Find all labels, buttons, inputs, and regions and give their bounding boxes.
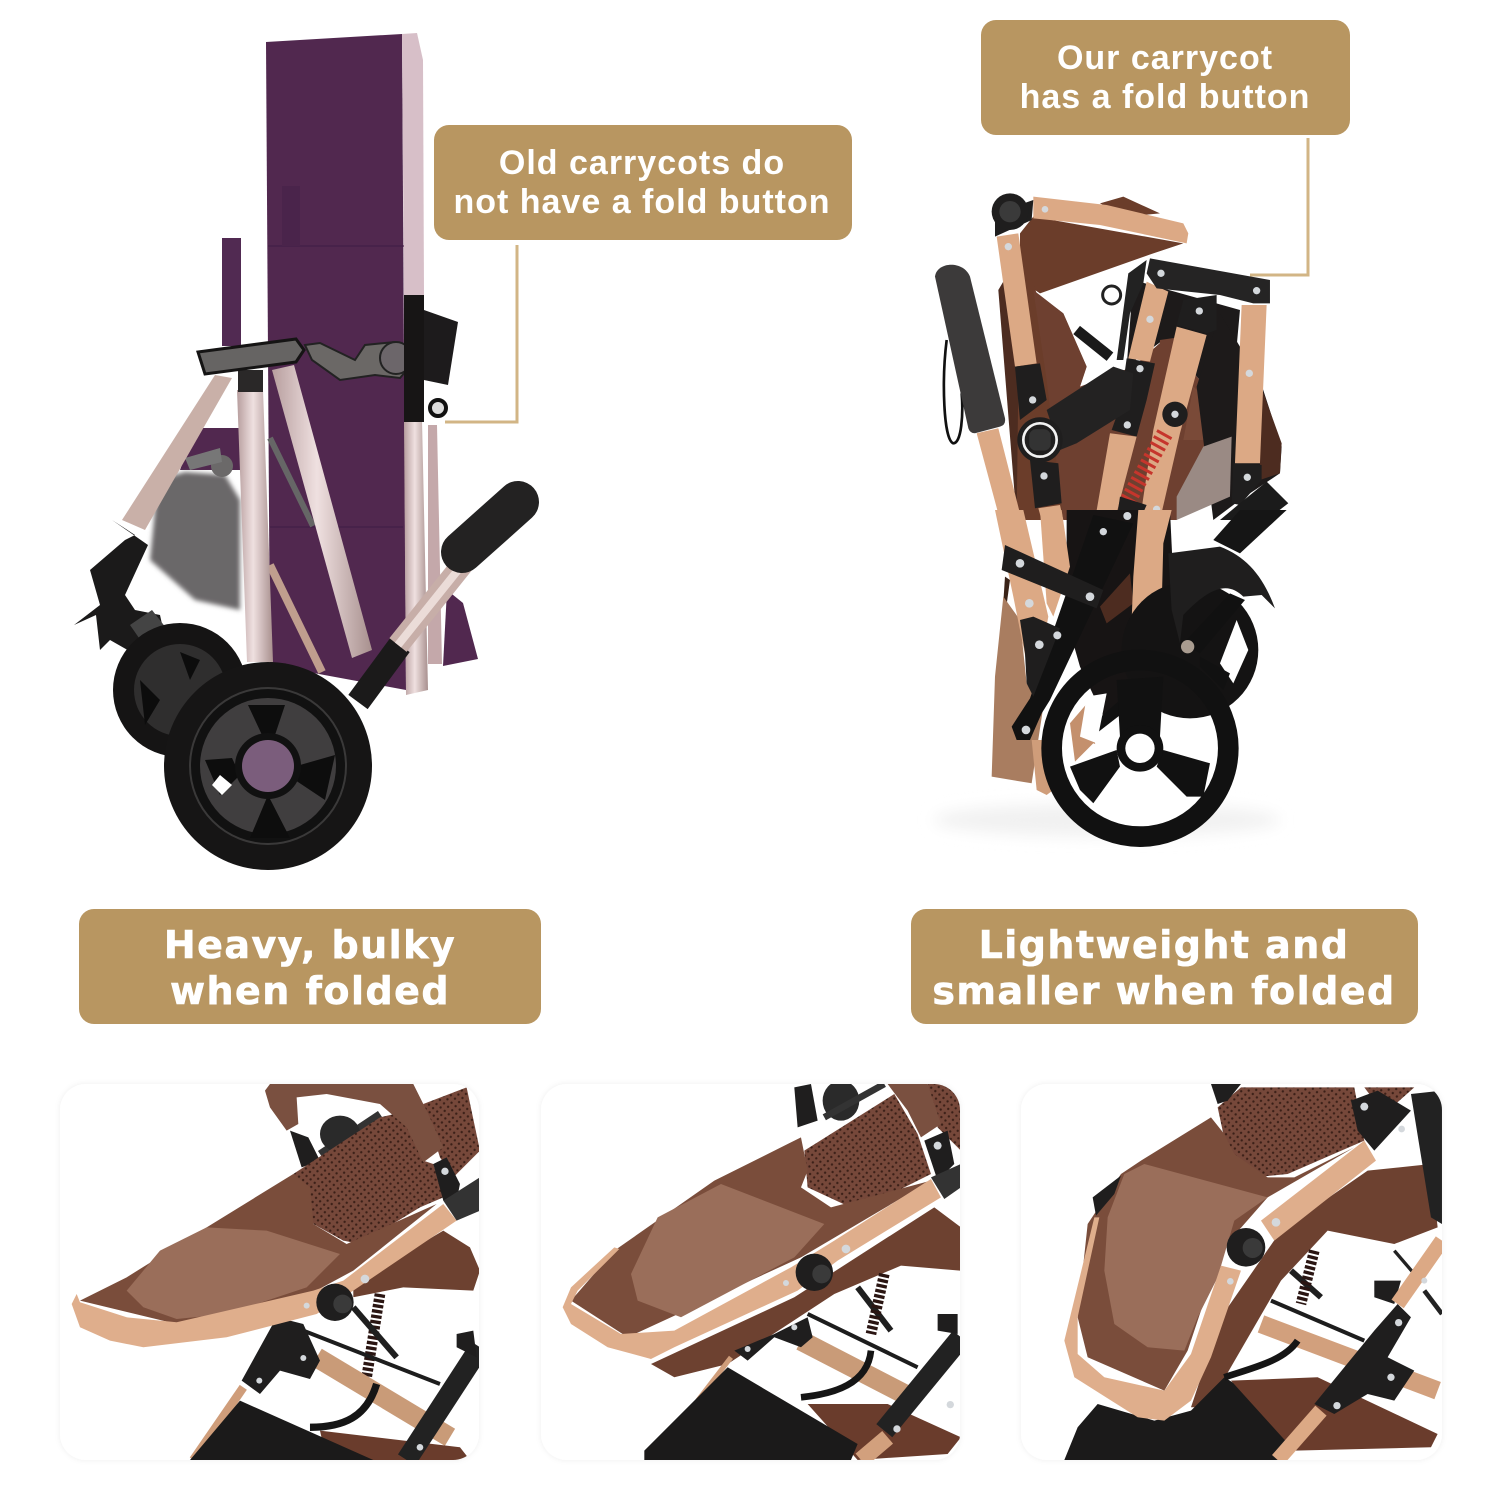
label: heavy, bulky [79,909,541,1024]
connector line: new carrycot [1250,138,1308,275]
callout: old carrycots: Old carrycots do [499,144,785,182]
lower half with wheels [933,510,1287,837]
callout: our carrycot: Our carrycot [1057,39,1273,77]
label: lightweight: Lightweight and [979,923,1349,967]
callout: our carrycot [981,20,1350,135]
label: lightweight [911,909,1418,1024]
label: heavy, bulky: when folded [170,969,450,1013]
blurred grey interior [150,472,240,610]
label: lightweight: smaller when folded [932,969,1396,1013]
right folded stroller: new carrycot [933,193,1288,837]
photo panel: footrest fully raised [1064,1084,1442,1460]
rear wheel [113,623,247,757]
purple folded carrycot board [266,34,406,690]
photo panel: footrest flat [60,1084,480,1460]
folded handle [358,502,518,702]
upper half of stroller [935,193,1288,520]
callout: our carrycot: has a fold button [1020,78,1310,116]
front bracket [74,520,170,660]
front wheel [164,662,372,870]
label: heavy, bulky: Heavy, bulky [164,923,456,967]
fold hinge bar and lever [198,339,304,374]
callout: old carrycots [434,125,852,240]
callout: old carrycots: not have a fold button [453,183,831,221]
photo panel: footrest slightly raised [541,1081,961,1460]
connector line: old carrycot [445,245,517,422]
frame tubes [122,375,232,530]
left folded stroller: old carrycot [74,33,518,870]
